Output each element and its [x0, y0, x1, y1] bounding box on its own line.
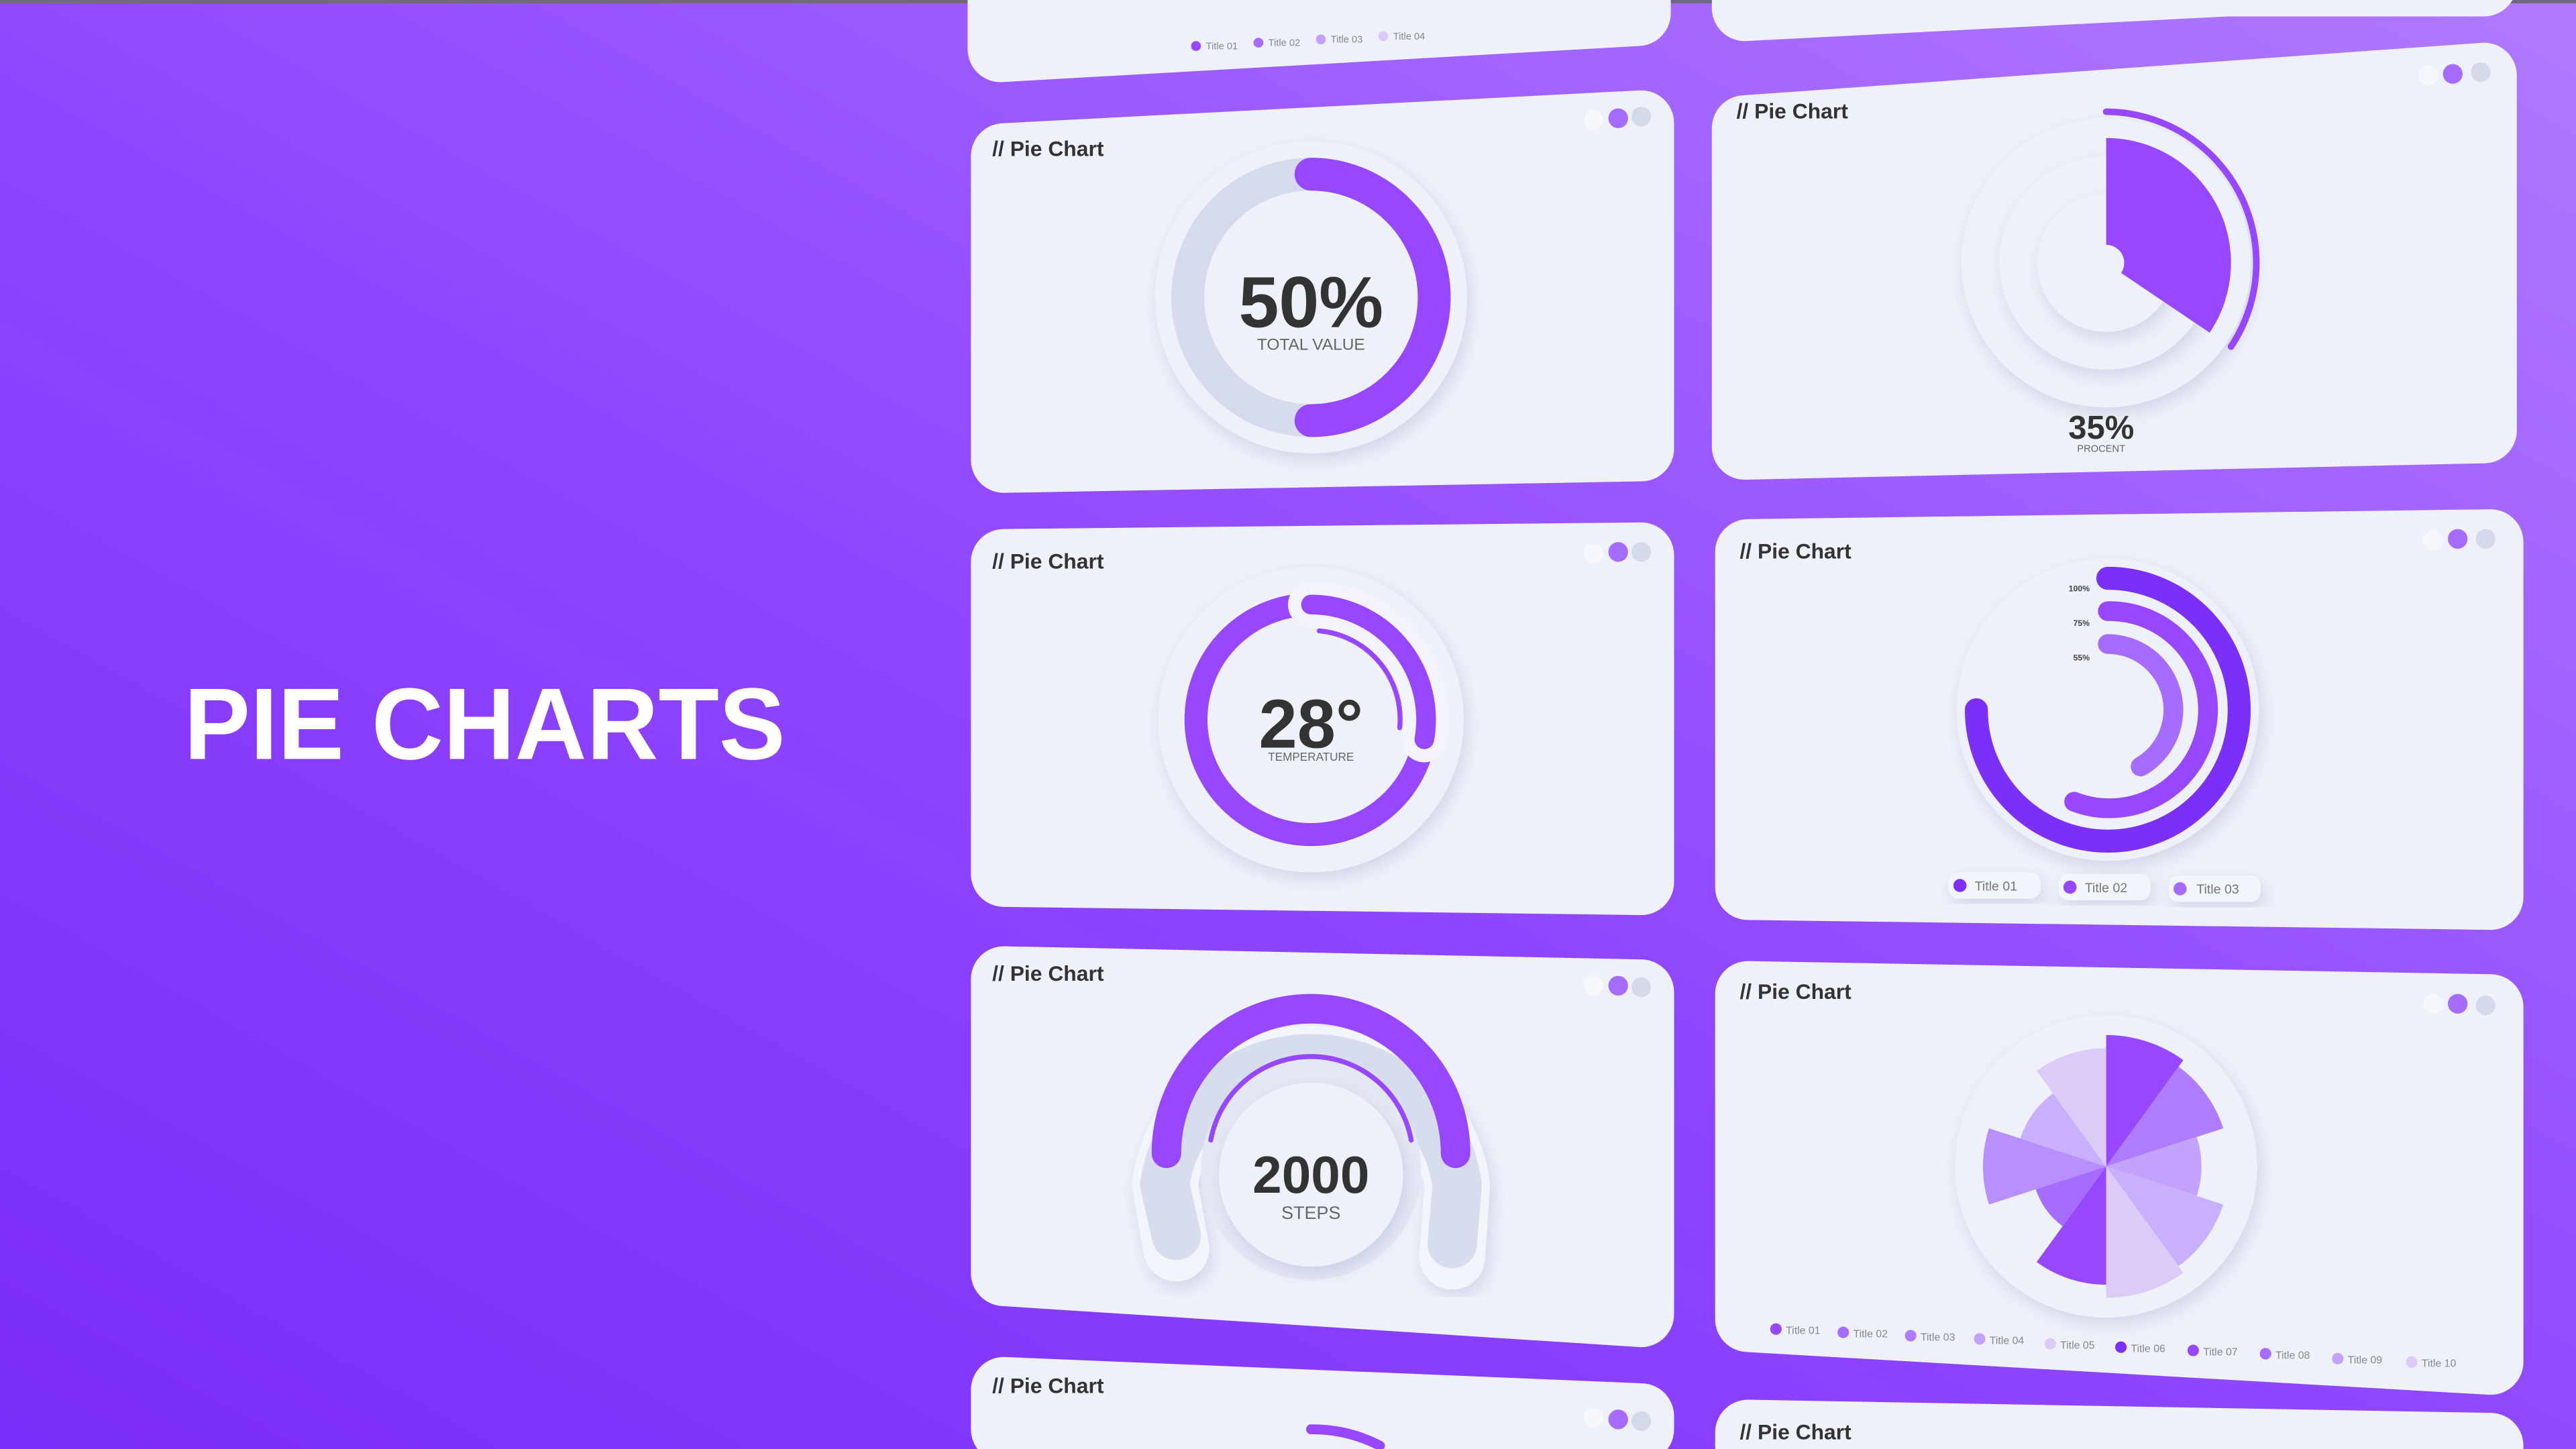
panel: rose chart card: Title 04 — [1990, 1335, 2024, 1346]
panel: bottom-right partial card: // Pie Chart — [1739, 1419, 1851, 1444]
panel: temperature card: TEMPERATURE — [1268, 750, 1354, 763]
panel: steps gauge card — [992, 961, 1651, 1314]
title: PIE CHARTS — [184, 667, 786, 781]
panel: rose chart card — [1739, 979, 2496, 1370]
panel: temperature card — [992, 542, 1651, 882]
panel: rose chart card: Title 10 — [2422, 1358, 2457, 1370]
panel: rose chart card: Title 09 — [2348, 1355, 2382, 1366]
panel: top-left partial card: Title 01 — [1206, 41, 1238, 52]
panel: multi-ring card: Title 02 — [2085, 881, 2127, 896]
panel: rose chart card: // Pie Chart — [1739, 979, 1851, 1004]
panel: top-left partial card: Title 02 — [1269, 38, 1300, 49]
panel: 50% donut card — [992, 107, 1651, 460]
panel: multi-ring card: 75% — [2074, 619, 2090, 628]
panel: 35% wedge card — [1737, 62, 2491, 454]
panel: top-left partial card: Title 03 — [1331, 35, 1362, 46]
panel: 50% donut card: TOTAL VALUE — [1257, 336, 1365, 354]
panel: bottom-right partial card — [1739, 1419, 2491, 1446]
panel: top-left partial card — [1000, 0, 1638, 52]
panel: 50% donut card: 50% — [1238, 261, 1383, 342]
panel: multi-ring card: 100% — [2069, 584, 2090, 594]
panel: multi-ring card — [1739, 529, 2496, 902]
panel: 50% donut card: // Pie Chart — [992, 137, 1104, 161]
panel: temperature card: 28° — [1259, 685, 1363, 762]
panel: bottom-left partial card: // Pie Chart — [992, 1374, 1104, 1398]
panel: bottom-left partial card — [992, 1374, 1651, 1446]
panel: rose chart card: Title 08 — [2275, 1350, 2310, 1361]
panel: 35% wedge card: 35% — [2068, 410, 2134, 446]
panel: temperature card: // Pie Chart — [992, 549, 1104, 573]
panel: multi-ring card: Title 03 — [2196, 882, 2239, 897]
panel: steps gauge card: // Pie Chart — [992, 961, 1104, 985]
panel: steps gauge card: 2000 — [1252, 1145, 1369, 1204]
panel: top-right partial card — [1745, 0, 2484, 8]
panel: multi-ring card: Title 01 — [1975, 879, 2017, 894]
panel: rose chart card: Title 03 — [1921, 1332, 1955, 1343]
panel: 35% wedge card: PROCENT — [2077, 443, 2125, 454]
panel: multi-ring card: 55% — [2074, 653, 2090, 662]
panel: rose chart card: Title 07 — [2203, 1346, 2238, 1358]
panel: top-left partial card: Title 04 — [1393, 32, 1425, 42]
panel: rose chart card: Title 01 — [1786, 1326, 1821, 1337]
panel: rose chart card: Title 02 — [1853, 1328, 1888, 1340]
panel: 35% wedge card: // Pie Chart — [1737, 99, 1848, 123]
panel: multi-ring card: // Pie Chart — [1739, 539, 1851, 564]
panel: rose chart card: Title 05 — [2060, 1340, 2095, 1352]
panel: steps gauge card: STEPS — [1281, 1203, 1340, 1223]
panel: rose chart card: Title 06 — [2131, 1344, 2165, 1355]
